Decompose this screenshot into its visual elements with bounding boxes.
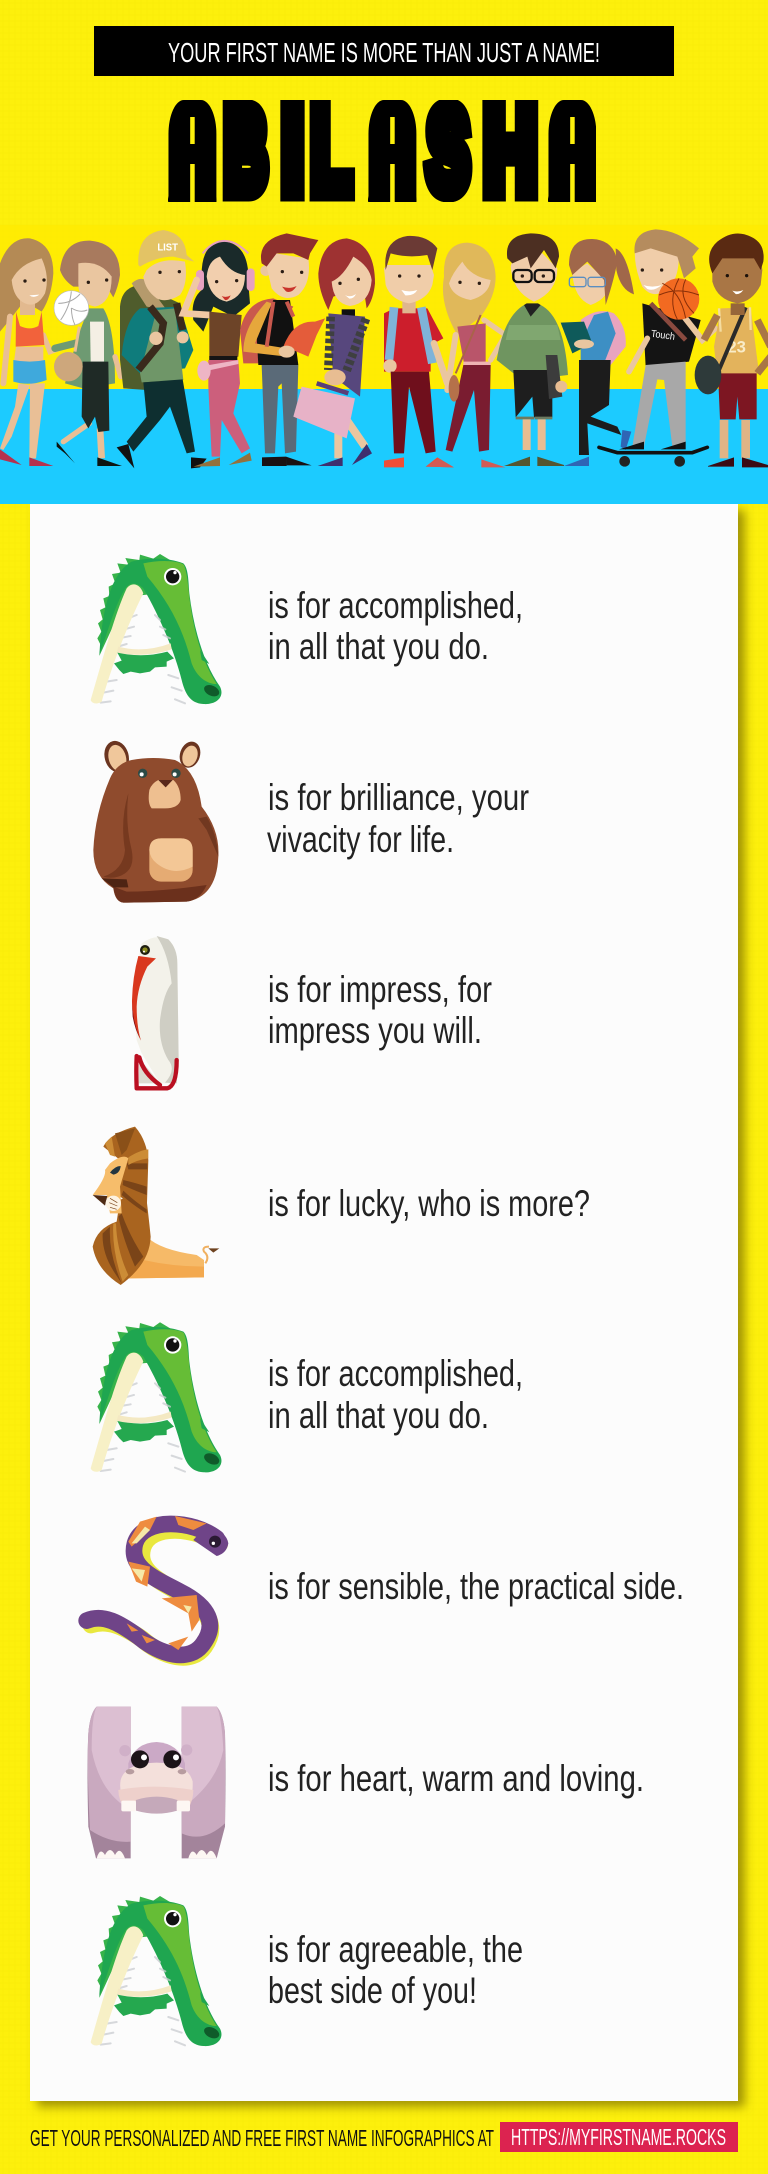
person 1 <box>0 238 78 466</box>
row 1 text: in all that you do. <box>268 626 489 667</box>
person 2 <box>54 241 122 466</box>
white content panel <box>30 504 738 2101</box>
row 4: lion letter L icon <box>93 1127 219 1285</box>
row 1 text: is for accomplished, <box>268 585 523 626</box>
row 8 text: is for agreeable, the <box>268 1929 523 1970</box>
person 10 <box>561 239 634 466</box>
row 5: crocodile letter A icon <box>91 1322 221 1472</box>
group of twelve cartoon students, left half <box>0 230 375 468</box>
blue floor band <box>0 389 768 504</box>
person 5 <box>240 233 325 466</box>
title: name ABILASHA <box>168 100 596 202</box>
person 3: LIST <box>157 243 178 254</box>
person 11 <box>599 229 717 467</box>
person 7 <box>383 236 454 467</box>
row 8 text <box>268 1929 523 2011</box>
person 3 <box>117 230 207 468</box>
row 2 text <box>267 777 529 860</box>
row 1 text <box>268 585 523 667</box>
person 12 <box>695 233 768 467</box>
row 3: stork letter I icon <box>132 936 179 1088</box>
row 8 text: best side of you! <box>268 1970 477 2011</box>
row 2: bear letter B icon <box>93 738 218 903</box>
row 1: crocodile letter A icon <box>91 554 221 704</box>
row 2 text: is for brilliance, your <box>268 777 529 818</box>
row 3 text: impress you will. <box>268 1010 482 1051</box>
row 3 text: is for impress, for <box>268 969 492 1010</box>
person 6 <box>293 238 375 466</box>
person 12: 23 <box>727 338 746 357</box>
row 5 text: in all that you do. <box>268 1395 489 1436</box>
person 9 <box>497 233 568 466</box>
top banner bar <box>94 26 674 76</box>
row 5 text <box>268 1353 523 1436</box>
row 7 text: is for heart, warm and loving. <box>268 1758 644 1799</box>
row 3 text <box>268 969 492 1051</box>
row 5 text: is for accomplished, <box>268 1353 523 1394</box>
person 11: Touch <box>650 329 676 343</box>
row 8: crocodile letter A icon <box>91 1896 221 2046</box>
group of twelve cartoon students, right half <box>383 229 768 467</box>
person 4 <box>183 241 255 467</box>
row 6: snake letter S icon <box>87 1516 228 1657</box>
row 4 text: is for lucky, who is more? <box>268 1183 590 1224</box>
row 2 text: vivacity for life. <box>267 819 454 860</box>
row 7: hippo letter H icon <box>87 1707 225 1858</box>
person 8 <box>426 243 506 467</box>
